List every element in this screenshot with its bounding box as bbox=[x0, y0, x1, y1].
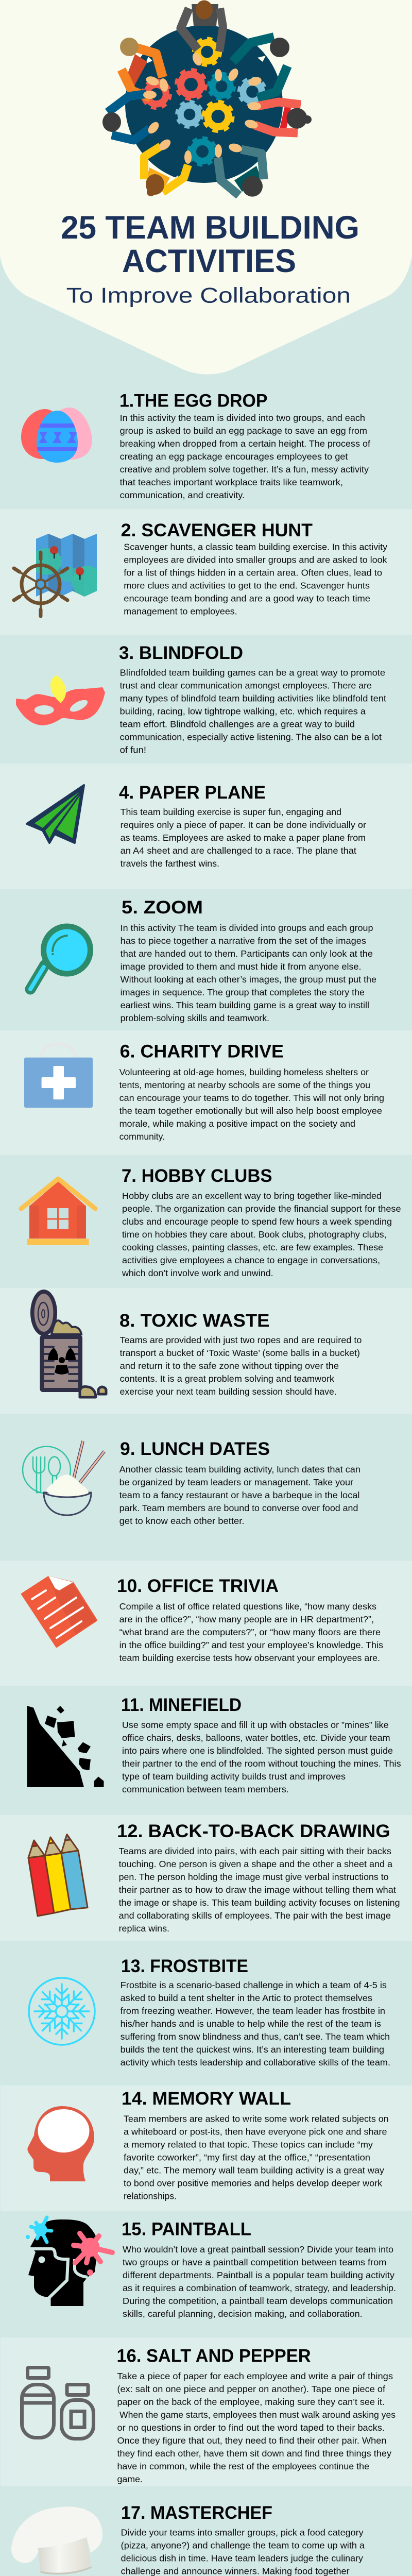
panel: 5 zoom bbox=[0, 889, 412, 1030]
icon: coloured pencils bbox=[28, 1835, 88, 1916]
title bbox=[61, 210, 359, 307]
icon: paper plane bbox=[27, 785, 84, 843]
text block: of fun! bbox=[120, 745, 146, 755]
text block: Blindfolded team building games can be a great way to promote bbox=[120, 668, 385, 678]
text block: contents. It is a great problem solving and teamwork bbox=[120, 1374, 334, 1384]
person: bottom right bbox=[215, 142, 264, 197]
heading: 1.THE EGG DROP bbox=[119, 390, 267, 411]
text block: people. The organization can provide the financial support for these bbox=[122, 1204, 401, 1214]
text block: problem-solving skills and teamwork. bbox=[121, 1013, 269, 1023]
text block: Who wouldn’t love a great paintball session? Divide your team into bbox=[123, 2244, 393, 2255]
text block: activities give employees a chance to engage in conversations, bbox=[122, 1255, 380, 1265]
text block: transport a bucket of ‘Toxic Waste’ (some balls in a bucket) bbox=[120, 1348, 360, 1358]
cream header shape bbox=[0, 0, 412, 374]
text block: This team building exercise is super fun, engaging and bbox=[121, 807, 341, 817]
panel: 10 office trivia bbox=[0, 1561, 412, 1686]
heading: 12. BACK-TO-BACK DRAWING bbox=[117, 1821, 390, 1841]
text block: to bond over positive memories and helps develop deeper work bbox=[124, 2178, 382, 2189]
text block bbox=[121, 1980, 390, 2067]
text block: be organized by team leaders or management. Take your bbox=[119, 1477, 353, 1487]
text block: their partner to the end of the room without touching the mines. This bbox=[122, 1758, 401, 1769]
heading: 3. BLINDFOLD bbox=[119, 642, 243, 663]
icon: plate and rice bowl bbox=[23, 1441, 104, 1515]
text block: Compile a list of office related questions like, “how many desks bbox=[119, 1601, 376, 1612]
text block bbox=[124, 542, 387, 617]
heading: 6. CHARITY DRIVE bbox=[120, 1041, 284, 1062]
text block: requires only a piece of paper. It can be done individually or bbox=[121, 820, 366, 830]
heading: 9. LUNCH DATES bbox=[120, 1438, 270, 1459]
text block: communication between team members. bbox=[122, 1784, 289, 1794]
text block: in the office building?” and test your employee’s knowledge. This bbox=[119, 1640, 383, 1650]
text block: breaking when dropped from a certain height. The process of bbox=[120, 438, 370, 449]
text block: favorite coworker”, “my first day at the office,” “presentation bbox=[124, 2153, 370, 2163]
panel: 3 blindfold bbox=[0, 635, 412, 764]
text block: employees are divided into smaller groups and are asked to look bbox=[124, 555, 387, 565]
text block: building, racing, low tightrope walking, etc. which requires a bbox=[120, 706, 366, 716]
header panel bbox=[0, 0, 412, 374]
icon: salt and pepper shakers bbox=[22, 2368, 94, 2439]
text block: type of team building activity builds trust and improves bbox=[122, 1771, 346, 1782]
person: right bbox=[244, 102, 312, 133]
text block bbox=[117, 2371, 396, 2484]
panel: 13 frostbite bbox=[0, 1941, 412, 2086]
text block: creative and problem solve together. It’s a fun, messy activity bbox=[120, 464, 369, 474]
icon: toxic waste can bbox=[30, 1290, 106, 1397]
heading: 16. SALT AND PEPPER bbox=[116, 2346, 311, 2366]
panel: 2 scavenger hunt bbox=[0, 509, 412, 635]
panel: 1 the egg drop bbox=[21, 394, 371, 500]
text block: creating an egg package encourages employees to get bbox=[120, 451, 348, 462]
text block: touching. One person is given a shape and the other a sheet and a bbox=[119, 1859, 392, 1869]
text block: trust and clear communication amongst employees. There are bbox=[120, 680, 372, 690]
text block: into pairs where one is blindfolded. The sighted person must guide bbox=[122, 1745, 393, 1756]
panel: 7 hobby clubs bbox=[0, 1155, 412, 1288]
text block: are in the office?”, “how many people are in HR department?”, bbox=[119, 1614, 374, 1624]
text block: an A4 sheet and are challenged to a race. The plane that bbox=[121, 845, 356, 856]
heading: 10. OFFICE TRIVIA bbox=[117, 1575, 279, 1596]
text block: many types of blindfold team building activities like blindfold tent bbox=[120, 693, 386, 704]
text block bbox=[120, 1335, 362, 1397]
text block bbox=[119, 1067, 384, 1142]
text block: skills, careful planning, decision making, and collaboration. bbox=[123, 2309, 363, 2319]
text block: group is asked to build an egg package to save an egg from bbox=[120, 426, 367, 436]
text block: from freezing weather. However, the team leader has frostbite in bbox=[121, 2006, 385, 2016]
text block: image provided to them and must hide it from anyone else. bbox=[121, 961, 361, 972]
text block: office chairs, desks, balloons, water bottles, etc. Divide your team bbox=[122, 1733, 390, 1743]
panel: 14 memory wall bbox=[1, 2086, 412, 2211]
gears bbox=[143, 39, 265, 164]
person: left bbox=[102, 91, 161, 140]
person: upper right bbox=[227, 37, 289, 98]
text block bbox=[119, 1601, 383, 1663]
text block: the image or shape is. This team building activity focuses on listening bbox=[119, 1897, 400, 1908]
text block: Volunteering at old-age homes, building homeless shelters or bbox=[119, 1067, 369, 1077]
text block: team to a fancy restaurant or have a barbeque in the local bbox=[119, 1490, 359, 1500]
illustration: team around table with gears bbox=[102, 0, 312, 200]
heading: 7. HOBBY CLUBS bbox=[122, 1165, 272, 1186]
heading: 11. MINEFIELD bbox=[121, 1694, 242, 1715]
text block: Once they figure that out, they need to find their other pair. When bbox=[117, 2435, 386, 2446]
text block: their partner as to how to draw the image without telling them what bbox=[119, 1885, 396, 1895]
text block: can encourage your teams to do together. This will not only bring bbox=[119, 1093, 384, 1103]
text block: encourage team bonding and are a good way to teach time bbox=[124, 594, 370, 604]
text block: that are handed out to them. Participants can only look at the bbox=[121, 948, 373, 959]
text block: communication, and creativity. bbox=[120, 490, 245, 500]
text block: In this activity The team is divided into groups and each group bbox=[121, 923, 373, 933]
text block: the team together emotionally but will also help boost employee bbox=[119, 1106, 382, 1116]
panel: 9 lunch dates bbox=[0, 1414, 412, 1561]
icon: medical bag bbox=[24, 1044, 93, 1108]
text block: delicious dish in time. Have team leaders judge the culinary bbox=[121, 2553, 363, 2564]
text block: Frostbite is a scenario-based challenge in which a team of 4-5 is bbox=[121, 1980, 387, 1990]
person: bottom left bbox=[144, 138, 192, 196]
text block: or no questions in order to find out the word taped to their backs. bbox=[117, 2422, 385, 2433]
text block: morale, while making a positive impact on the society and bbox=[119, 1118, 355, 1129]
heading: 5. ZOOM bbox=[122, 897, 203, 918]
text block: replica wins. bbox=[119, 1923, 169, 1934]
panel: 8 toxic waste bbox=[0, 1288, 412, 1414]
text block: When the game starts, employees then must walk around asking yes bbox=[119, 2410, 396, 2420]
text block: more clues and activities to get to the end. Scavenger hunts bbox=[124, 581, 370, 591]
text block: (pizza, anyone?) and challenge the team to come up with a bbox=[121, 2540, 365, 2551]
text block: asked to build a tent shelter in the Artic to protect themselves bbox=[121, 1993, 372, 2003]
text block: a memory related to that topic. These topics can include “my bbox=[124, 2139, 373, 2149]
person: upper left bbox=[120, 38, 169, 98]
text block: have in common, while the rest of the employees continue the bbox=[117, 2461, 369, 2471]
icon: easter eggs bbox=[21, 408, 92, 463]
text block bbox=[121, 2528, 365, 2576]
icon: map and ship wheel bbox=[14, 531, 103, 616]
title: To Improve Collaboration bbox=[66, 283, 351, 307]
text block bbox=[122, 1720, 401, 1794]
text block: game. bbox=[117, 2474, 143, 2484]
text block bbox=[123, 2244, 396, 2319]
text block: paper on the back of the employee, making sure they can’t see it. bbox=[117, 2397, 385, 2407]
icon: falling rocks bbox=[27, 1706, 104, 1787]
text block: relationships. bbox=[124, 2191, 177, 2201]
text block: Without looking at each other’s images, the group must put the bbox=[121, 974, 376, 985]
text block bbox=[122, 1191, 401, 1278]
text block bbox=[120, 668, 386, 755]
heading: 2. SCAVENGER HUNT bbox=[121, 520, 313, 540]
person: top bbox=[181, 0, 223, 81]
icon: magnifying glass bbox=[30, 926, 91, 989]
table bbox=[125, 25, 283, 183]
text block: team effort. Blindfold challenges are a great way to build bbox=[120, 719, 355, 730]
text block bbox=[119, 1846, 400, 1934]
text block: Use some empty space and fill it up with obstacles or ”mines” like bbox=[122, 1720, 389, 1730]
text block: they find each other, have them sit down and find three things they bbox=[117, 2448, 391, 2459]
text block: two groups or have a paintball competition between teams from bbox=[123, 2257, 386, 2267]
text block: which don’t involve work and unwind. bbox=[122, 1268, 273, 1278]
text block: pen. The person holding the image must give verbal instructions to bbox=[119, 1872, 389, 1882]
text block: earliest wins. This team building game is a great way to instill bbox=[121, 1000, 369, 1010]
table edge gaps bbox=[116, 19, 266, 200]
text block: community. bbox=[119, 1131, 165, 1142]
text block: that teaches important workplace traits like teamwork, bbox=[120, 477, 343, 487]
text block bbox=[121, 923, 376, 1023]
text block: clubs and encourage people to spend few hours a week spending bbox=[122, 1216, 392, 1227]
text block: park. Team members are bound to converse over food and bbox=[119, 1503, 358, 1513]
text block: Divide your teams into smaller groups, pick a food category bbox=[121, 2528, 364, 2538]
panel: 16 salt and pepper bbox=[1, 2337, 412, 2486]
heading: 4. PAPER PLANE bbox=[119, 782, 266, 803]
text block: communication, especially active listening. The also can be a lot bbox=[120, 732, 382, 742]
text block: day,” etc. The memory wall team building activity is a great way bbox=[124, 2165, 384, 2175]
icon: house bbox=[21, 1179, 95, 1245]
text block: tents, mentoring at nearby schools are some of the things you bbox=[119, 1080, 370, 1090]
panel: 4 paper plane bbox=[0, 764, 412, 889]
text block: get to know each other better. bbox=[119, 1516, 244, 1526]
text block: Teams are divided into pairs, with each pair sitting with their backs bbox=[119, 1846, 391, 1856]
text block: travels the farthest wins. bbox=[121, 858, 219, 869]
panel: 6 charity drive bbox=[0, 1030, 412, 1155]
text block: time on hobbies they care about. Book clubs, photography clubs, bbox=[122, 1229, 386, 1240]
text block: different departments. Paintball is a popular team building activity bbox=[123, 2270, 394, 2280]
text block: a whiteboard or post-its, then have everyone pick one and share bbox=[124, 2127, 387, 2137]
icon: snowflake bbox=[29, 1978, 95, 2045]
icon: document bbox=[22, 1576, 96, 1647]
text block: management to employees. bbox=[124, 606, 237, 617]
text block: as it requires a combination of teamwork, strategy, and leadership. bbox=[123, 2283, 396, 2293]
text block: for a list of things hidden in a certain area. Often clues, lead to bbox=[124, 568, 382, 578]
panel: 17 masterchef bbox=[1, 2486, 412, 2576]
text block: In this activity the team is divided into two groups, and each bbox=[120, 413, 365, 423]
text block: cooking classes, painting classes, etc. are few examples. These bbox=[122, 1242, 383, 1252]
text block: as teams. Employees are asked to make a paper plane from bbox=[121, 833, 366, 843]
icon: paintball helmet bbox=[26, 2217, 112, 2306]
text block bbox=[121, 807, 366, 869]
heading: 17. MASTERCHEF bbox=[121, 2502, 272, 2523]
heading: 13. FROSTBITE bbox=[121, 1956, 248, 1976]
text block: Scavenger hunts, a classic team building exercise. In this activity bbox=[124, 542, 387, 552]
panel: 12 back-to-back drawing bbox=[0, 1815, 412, 1941]
text block: activity which tests leadership and collaborative skills of the team. bbox=[121, 2057, 390, 2067]
text block: his/her hands and is unable to help while the rest of the team is bbox=[121, 2019, 381, 2029]
text block: “what brand are the computers?”, or “how many floors are there bbox=[119, 1627, 381, 1637]
text block bbox=[120, 413, 370, 500]
text block: Take a piece of paper for each employee and write a pair of things bbox=[117, 2371, 393, 2381]
text block: Another classic team building activity, lunch dates that can bbox=[119, 1464, 360, 1475]
text block: has to piece together a narrative from the set of the images bbox=[121, 936, 366, 946]
text block: (ex: salt on one piece and pepper on another). Tape one piece of bbox=[117, 2384, 385, 2394]
text block: images in sequence. The group that completes the story the bbox=[121, 987, 365, 997]
text block: Hobby clubs are an excellent way to bring together like-minded bbox=[122, 1191, 382, 1201]
text block: During the competition, a paintball team develops communication bbox=[123, 2296, 393, 2306]
text block: and return it to the safe zone without tipping over the bbox=[120, 1361, 339, 1371]
heading: 15. PAINTBALL bbox=[122, 2218, 251, 2239]
text block: suffering from snow blindness and thus, can’t see. The team which bbox=[121, 2031, 390, 2042]
text block bbox=[124, 2113, 389, 2201]
panel: 11 minefield bbox=[0, 1686, 412, 1815]
text block: Team members are asked to write some work related subjects on bbox=[124, 2113, 389, 2124]
heading: 14. MEMORY WALL bbox=[122, 2088, 291, 2109]
icon: head silhouette bbox=[27, 2106, 94, 2181]
text block: Teams are provided with just two ropes and are required to bbox=[120, 1335, 362, 1345]
title: 25 TEAM BUILDING bbox=[61, 210, 359, 246]
icon: mask bbox=[16, 675, 105, 725]
icon: chef hat bbox=[11, 2506, 102, 2574]
text block: exercise your next team building session should have. bbox=[120, 1386, 337, 1397]
text block: team building exercise tests how observant your employees are. bbox=[119, 1653, 380, 1663]
text block bbox=[119, 1464, 360, 1526]
text block: builds the tent the quickest wins. It’s an interesting team building bbox=[121, 2044, 384, 2055]
text block: and collaborating skills of employees. The pair with the best image bbox=[119, 1910, 391, 1921]
title: ACTIVITIES bbox=[122, 243, 296, 279]
panel: 15 paintball bbox=[1, 2211, 412, 2337]
heading: 8. TOXIC WASTE bbox=[119, 1310, 270, 1331]
